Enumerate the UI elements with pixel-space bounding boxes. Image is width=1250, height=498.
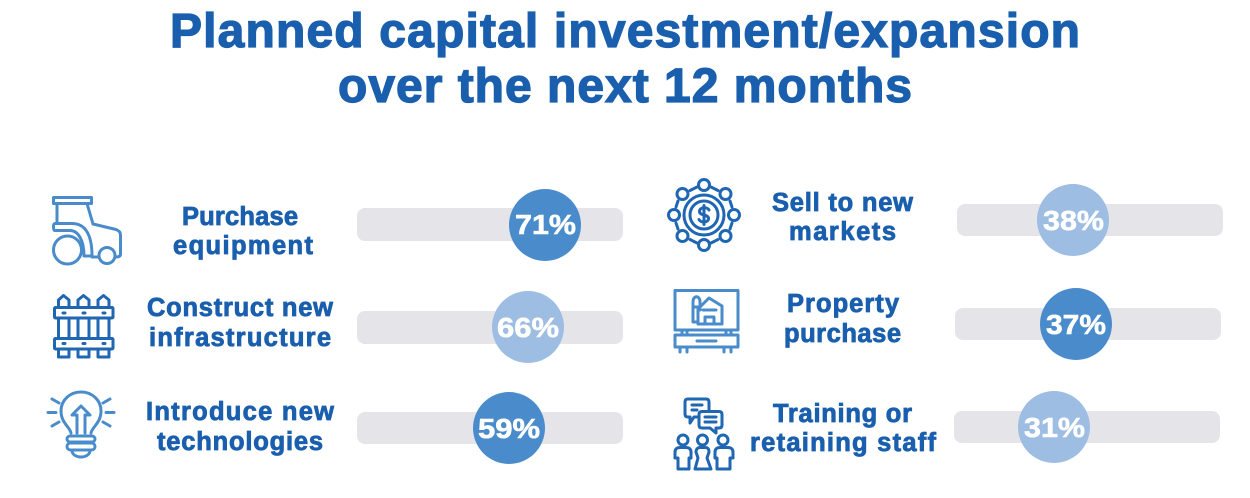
bar track [357,311,623,344]
value badge: 38% [1043,205,1104,236]
label [146,398,334,456]
label: technologies [157,428,323,456]
label: markets [789,218,896,246]
label: infrastructure [149,324,331,352]
label: retaining staff [750,429,936,457]
label: equipment [173,232,314,260]
label [750,400,936,457]
bar track [357,208,623,241]
label: Construct new [147,294,333,322]
icon: money network [668,180,740,250]
label: Training or [773,400,912,428]
value badge: 31% [1024,412,1085,443]
label [173,203,314,260]
value badge: 37% [1046,309,1106,340]
value badge [1018,391,1090,463]
label [784,290,901,348]
label [147,294,333,352]
title: over the next 12 months [338,60,912,113]
bar track [954,411,1220,443]
value badge: 66% [497,312,559,343]
value badge: 71% [515,209,576,240]
value badge [1037,184,1109,256]
label: purchase [784,320,901,348]
value badge [473,392,545,464]
icon: tractor [54,198,120,264]
value badge [1040,288,1112,360]
row: construct new infrastructure [54,291,623,363]
icon: staff with speech bubbles [675,399,733,469]
bar track [957,204,1223,236]
label [772,189,913,246]
bar track [955,308,1221,340]
label: Property [787,290,900,318]
label: Purchase [182,203,298,231]
title: Planned capital investment/expansion [170,5,1080,58]
row: purchase equipment [54,189,623,264]
row: sell to new markets [668,180,1223,256]
value badge [492,291,564,363]
icon: light bulb [48,392,114,457]
label: Sell to new [772,189,913,217]
value badge [509,189,581,261]
value badge: 59% [478,413,540,444]
row: introduce new technologies [48,392,623,464]
label: Introduce new [146,398,334,426]
row: training or retaining staff [675,391,1220,469]
bar track [357,412,623,444]
row: property purchase [675,288,1221,360]
icon: fence [54,296,113,357]
icon: barn on board [675,290,738,352]
title [170,5,1080,113]
